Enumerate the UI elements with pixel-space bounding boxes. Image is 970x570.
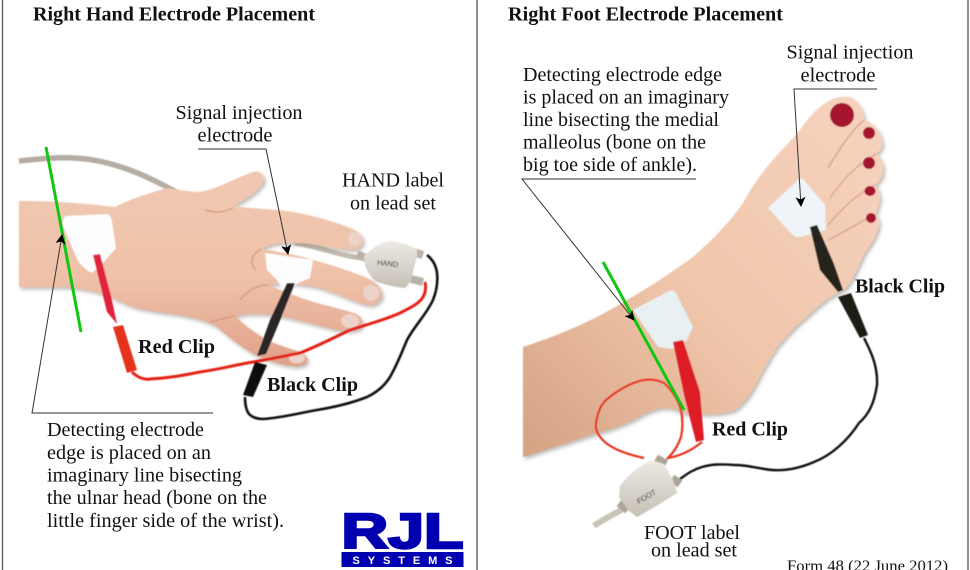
label: red clip: Red Clip xyxy=(712,418,788,440)
label: FOOT label: FOOT label xyxy=(644,522,740,544)
heading: right hand: Right Hand Electrode Placement xyxy=(33,4,315,26)
callout: detecting electrode, hand: little finger side of the wrist). xyxy=(47,510,284,532)
hand photo xyxy=(19,158,437,419)
label: HAND label: on lead set xyxy=(350,192,436,214)
label: signal injection electrode xyxy=(176,102,302,254)
label: signal injection electrode: electrode xyxy=(198,124,273,146)
black clip xyxy=(243,283,295,397)
grey tail wire xyxy=(594,508,625,526)
logo: RJL Systems: RJL xyxy=(342,505,464,559)
toe shading xyxy=(828,120,876,240)
callout: detecting electrode, foot xyxy=(522,64,729,320)
hand shape xyxy=(19,172,382,366)
red clip xyxy=(673,340,704,442)
label: signal injection electrode: Signal injection xyxy=(786,42,914,64)
heading: right foot: Right Foot Electrode Placement xyxy=(508,4,783,26)
foot shape xyxy=(523,97,883,457)
nails xyxy=(289,232,379,364)
green line: medial malleolus xyxy=(603,262,684,410)
label: signal injection electrode: electrode xyxy=(800,64,876,86)
label: signal injection electrode xyxy=(786,42,914,206)
green line: ulnar head xyxy=(46,147,81,332)
callout: detecting electrode, foot: malleolus (bone on the xyxy=(523,132,706,154)
FOOT connector xyxy=(619,458,680,517)
HAND connector: HAND xyxy=(377,258,399,269)
panel: right foot xyxy=(508,4,948,570)
foot photo xyxy=(523,97,883,526)
red wire xyxy=(132,282,426,379)
label: FOOT label: on lead set xyxy=(651,540,737,562)
FOOT connector: FOOT xyxy=(635,487,658,506)
label: HAND label xyxy=(342,170,444,214)
lead wire grey xyxy=(19,158,178,193)
label: black clip: Black Clip xyxy=(855,276,945,298)
callout: detecting electrode, hand: Detecting electrode xyxy=(47,419,204,441)
black wire xyxy=(680,338,877,479)
callout: detecting electrode, foot: Detecting electrode edge xyxy=(523,64,722,86)
panel: right hand xyxy=(19,4,464,567)
black clip xyxy=(810,225,868,338)
toenails xyxy=(830,103,876,223)
callout: detecting electrode, hand: imaginary line bisecting xyxy=(47,464,242,486)
callout: detecting electrode, hand: edge is placed on an xyxy=(47,442,211,464)
callout: detecting electrode, foot: is placed on an imaginary xyxy=(523,86,729,108)
label: black clip: Black Clip xyxy=(267,374,358,396)
label: red clip: Red Clip xyxy=(138,336,215,358)
red wire loop xyxy=(596,380,702,458)
detecting electrode pad xyxy=(63,214,116,273)
callout: detecting electrode, foot: line bisecting the medial xyxy=(523,109,719,131)
detecting electrode pad xyxy=(633,290,693,349)
red clip xyxy=(93,254,137,373)
label: HAND label: HAND label xyxy=(342,170,444,192)
signal electrode pad xyxy=(768,178,826,237)
callout: detecting electrode, hand: the ulnar head (bone on the xyxy=(47,487,267,509)
black wire xyxy=(245,255,437,419)
logo: RJL Systems xyxy=(342,505,464,567)
label: signal injection electrode: Signal injection xyxy=(176,102,302,124)
logo: RJL Systems: SYSTEMS xyxy=(352,555,452,567)
HAND connector xyxy=(357,241,423,288)
callout: detecting electrode, foot: big toe side of ankle). xyxy=(523,154,697,176)
signal electrode pad xyxy=(265,253,313,293)
label: FOOT label xyxy=(644,522,740,562)
callout: detecting electrode, hand xyxy=(32,235,284,532)
hand creases xyxy=(205,208,268,322)
